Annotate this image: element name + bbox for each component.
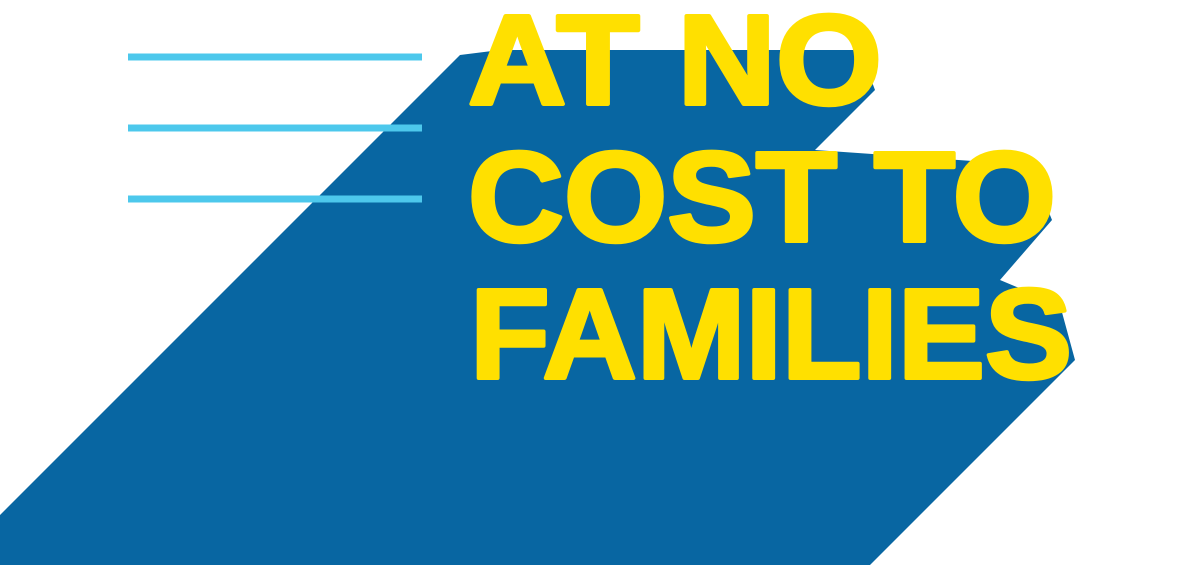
title text: COST TO xyxy=(468,126,1056,269)
decorative light blue lines xyxy=(128,57,422,199)
title text xyxy=(468,0,1072,406)
title text: FAMILIES xyxy=(470,263,1072,406)
